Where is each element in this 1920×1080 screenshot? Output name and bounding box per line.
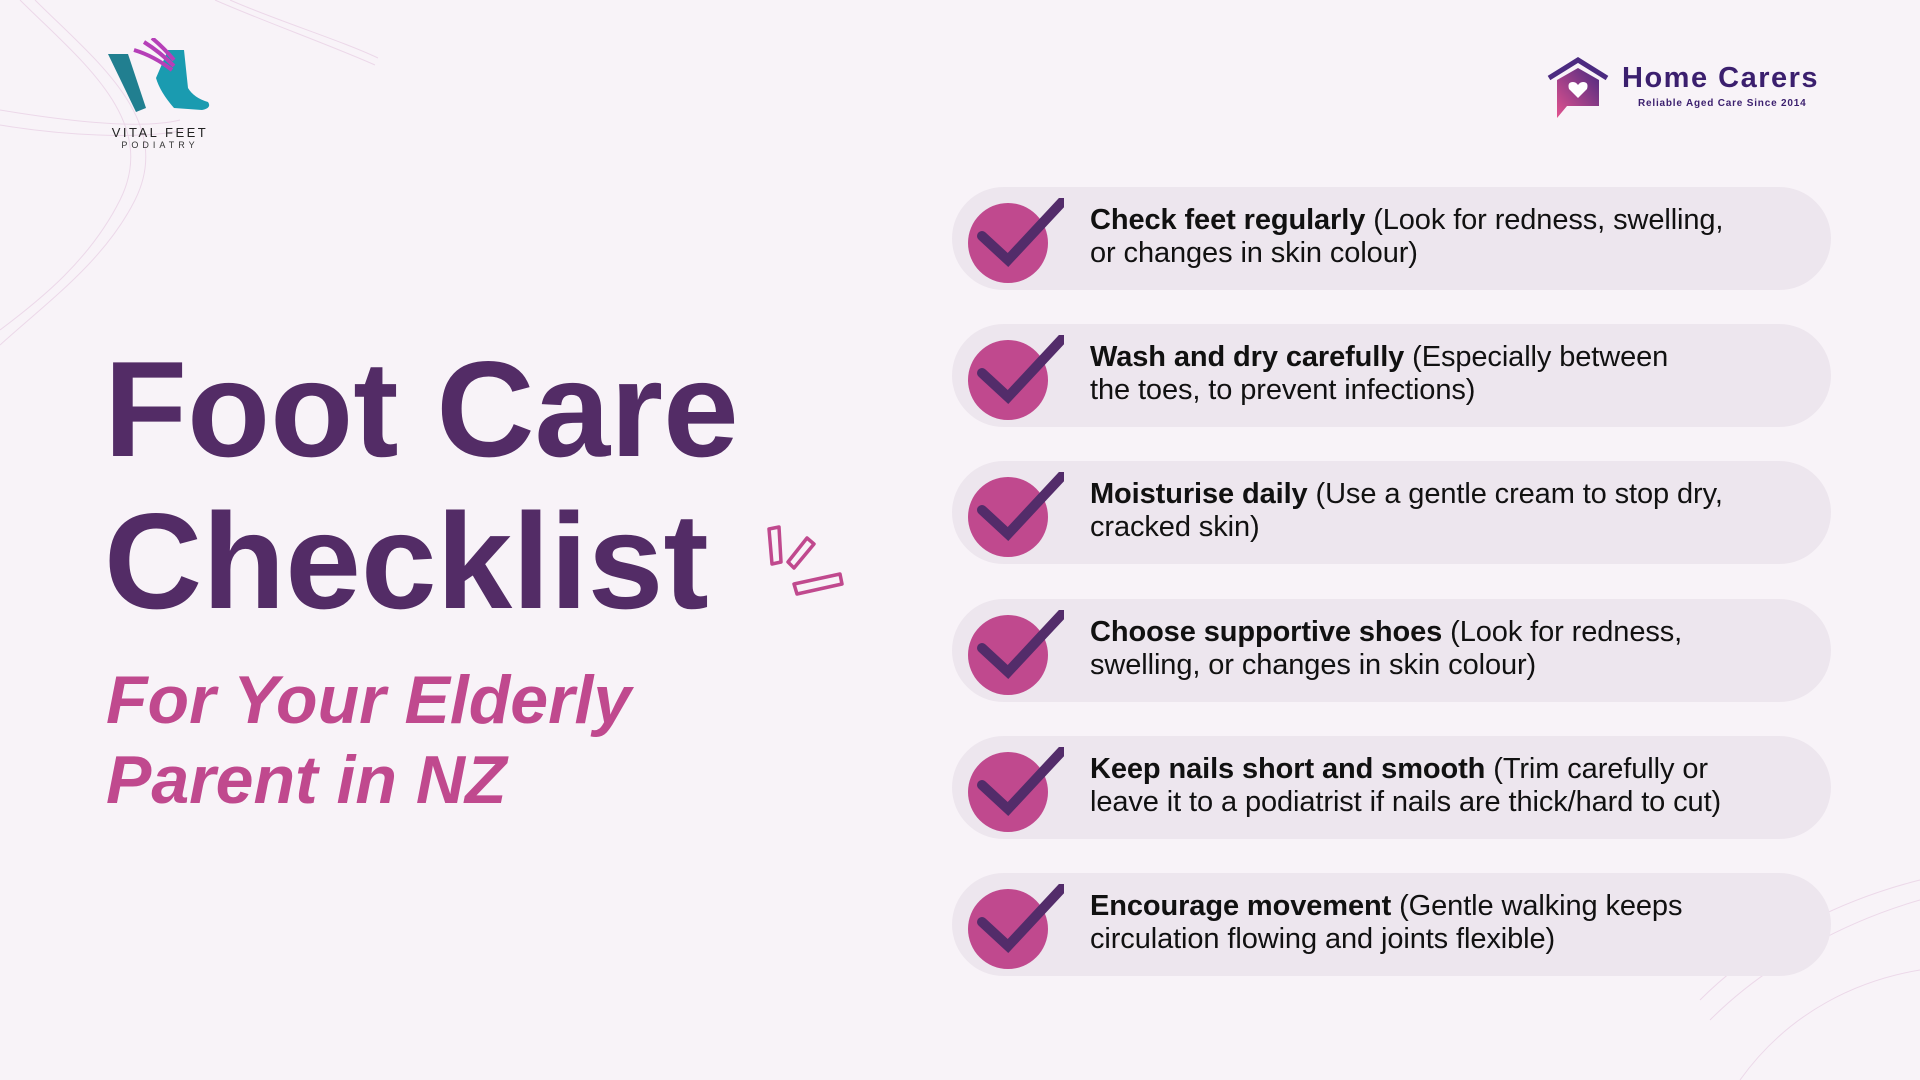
item 2	[952, 324, 1831, 427]
item 2: Wash and dry carefully (Especially between	[1090, 341, 1668, 373]
subtitle: For Your Elderly	[106, 662, 631, 738]
subtitle: Parent in NZ	[106, 742, 506, 818]
icon: sparkle marks	[767, 525, 844, 596]
icon: check	[968, 335, 1064, 420]
item 5: Keep nails short and smooth (Trim carefully or	[1090, 753, 1708, 785]
item 4	[952, 599, 1831, 702]
logo: Vital Feet Podiatry: VITAL FEET	[112, 125, 208, 140]
title	[104, 333, 739, 637]
logo: Vital Feet Podiatry	[108, 38, 210, 150]
item 6: circulation flowing and joints flexible)	[1090, 923, 1555, 955]
item 6	[952, 873, 1831, 976]
icon: check	[968, 610, 1064, 695]
logo: Home Carers	[1548, 57, 1819, 118]
item 4: Choose supportive shoes (Look for redness,	[1090, 616, 1682, 648]
item 1: Check feet regularly (Look for redness, swelling,	[1090, 204, 1723, 236]
logo: Home Carers: Reliable Aged Care Since 2014	[1638, 98, 1806, 109]
item 6: Encourage movement (Gentle walking keeps	[1090, 890, 1682, 922]
item 4: swelling, or changes in skin colour)	[1090, 649, 1536, 681]
item 5	[952, 736, 1831, 839]
subtitle	[106, 662, 634, 818]
item 2: the toes, to prevent infections)	[1090, 374, 1475, 406]
checklist	[952, 187, 1831, 976]
item 1	[952, 187, 1831, 290]
logo: Home Carers: Home Carers	[1622, 62, 1819, 94]
icon: house with heart	[1548, 57, 1608, 118]
item 3: Moisturise daily (Use a gentle cream to stop dry,	[1090, 478, 1723, 510]
item 5: leave it to a podiatrist if nails are thick/hard to cut)	[1090, 786, 1721, 818]
item 1: or changes in skin colour)	[1090, 237, 1418, 269]
title: Checklist	[104, 485, 709, 637]
item 3	[952, 461, 1831, 564]
item 3: cracked skin)	[1090, 511, 1260, 543]
icon: check	[968, 747, 1064, 832]
logo: Vital Feet Podiatry: PODIATRY	[121, 140, 199, 150]
icon: check	[968, 198, 1064, 283]
icon: check	[968, 884, 1064, 969]
title: Foot Care	[104, 333, 739, 485]
icon: check	[968, 472, 1064, 557]
